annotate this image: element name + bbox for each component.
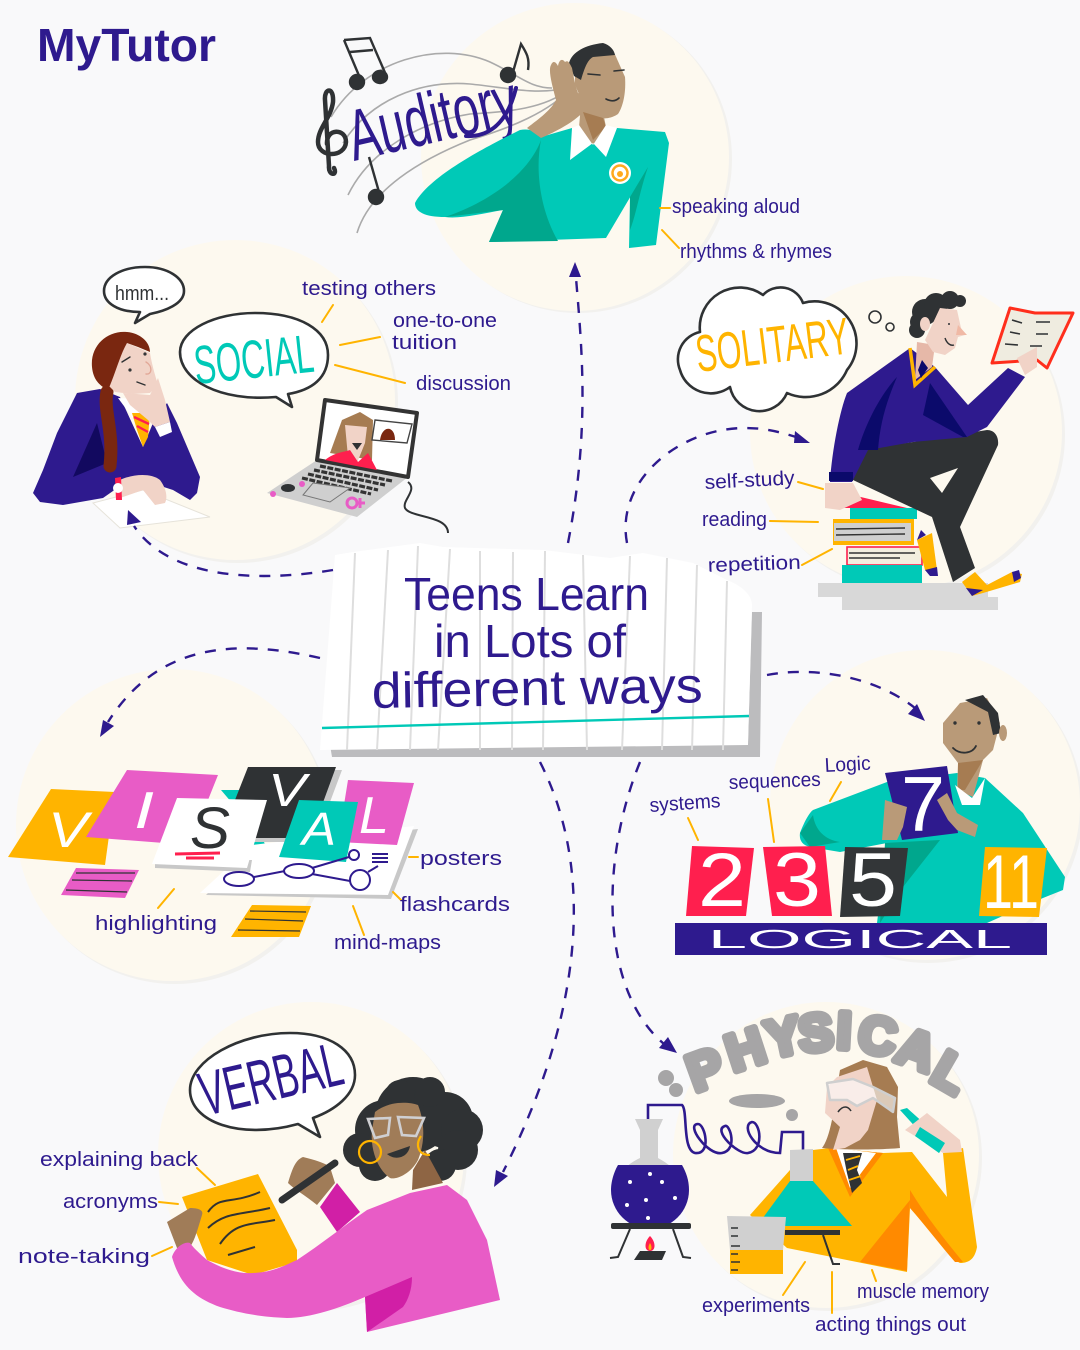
trousers <box>853 430 998 582</box>
label: repetition: repetition <box>707 552 801 577</box>
boy: collar <box>955 778 985 805</box>
panel: physical <box>610 1002 989 1336</box>
hair <box>822 1060 900 1150</box>
collar and tie <box>828 1148 883 1197</box>
woman: hair <box>343 1077 483 1181</box>
girl: hair <box>92 332 150 390</box>
boy: hair <box>965 695 1001 735</box>
sweater shadow <box>445 140 648 242</box>
smoke puffs <box>658 1070 798 1121</box>
boy: ear <box>999 725 1007 741</box>
swatch: orange <box>231 905 311 937</box>
center note card <box>320 543 762 757</box>
right sleeve <box>320 1183 360 1232</box>
boy: head and neck <box>943 698 1000 797</box>
label: mind-maps: mind-maps <box>334 932 441 954</box>
front foot <box>962 570 1022 596</box>
thought bubbles <box>869 311 894 331</box>
panel: auditory <box>318 3 832 313</box>
sweater shadow <box>365 1277 412 1332</box>
coiled tube <box>648 1105 803 1153</box>
girl: supporting hand <box>123 378 170 427</box>
arrow: to visual <box>100 648 320 737</box>
card: A <box>279 800 358 862</box>
laptop <box>267 400 417 517</box>
label: acting things out: acting things out <box>815 1314 966 1336</box>
neck and collar <box>910 342 935 385</box>
boy: face details <box>588 70 624 101</box>
mind map <box>224 850 388 890</box>
teal card behind <box>221 790 270 855</box>
leader lines <box>688 782 841 842</box>
conical flask <box>757 1149 852 1264</box>
boy: head <box>575 49 625 118</box>
leader lines <box>770 482 832 565</box>
card shadow <box>330 612 762 757</box>
boy: face details <box>953 722 980 753</box>
title line 1: Teens Learn <box>404 568 649 620</box>
label: rhythms and rhymes: rhythms & rhymes <box>680 241 832 263</box>
left hand <box>167 1208 202 1248</box>
girl: tie <box>132 413 150 447</box>
card: S <box>152 798 267 868</box>
boy: hair <box>569 43 615 80</box>
head <box>925 308 965 355</box>
arrow: to solitary <box>626 428 810 543</box>
red underline <box>175 853 220 858</box>
icon: treble clef <box>318 90 346 174</box>
hands <box>882 793 978 840</box>
icon: quarter note <box>369 157 383 204</box>
beaker <box>727 1216 786 1274</box>
hair <box>909 291 966 338</box>
speech bubble: social <box>180 313 328 407</box>
label: reading: reading <box>702 509 767 531</box>
logo: MyTutor: MyTutor <box>37 19 216 71</box>
heading: SOCIAL: SOCIAL <box>191 324 317 396</box>
panel: visual <box>8 669 510 984</box>
scribbles <box>208 1192 275 1255</box>
paper <box>182 1174 297 1275</box>
nose and smile <box>945 323 967 345</box>
panel: verbal <box>18 1002 500 1332</box>
girl: sweater <box>33 389 200 505</box>
arrow: to social <box>127 510 333 576</box>
panel: logical <box>649 650 1080 963</box>
text: hmm: hmm... <box>115 283 169 305</box>
face <box>825 1067 877 1150</box>
text: V: V <box>48 802 94 858</box>
label: note-taking: note-taking <box>18 1246 150 1268</box>
ear <box>920 317 930 331</box>
label: flashcards: flashcards <box>400 894 510 916</box>
card: 7 <box>885 766 958 840</box>
leader lines <box>660 208 679 248</box>
hand on books <box>825 483 862 510</box>
steps <box>818 583 998 610</box>
smoke heading: PHYSICAL: PHYSICAL <box>679 1002 979 1106</box>
boy: neck <box>579 105 606 145</box>
text: I: I <box>134 782 154 840</box>
title line 3: different ways <box>371 657 703 719</box>
girl: resting hand <box>120 475 166 505</box>
swatch: pink <box>61 868 139 898</box>
book stack <box>833 493 922 583</box>
pen <box>282 1163 335 1200</box>
text: 2: 2 <box>698 838 746 923</box>
arrow: to auditory <box>568 262 582 543</box>
sweater shadow <box>800 815 940 923</box>
woman: mouth <box>387 1146 410 1158</box>
boy: collar <box>570 125 617 160</box>
label: muscle memory: muscle memory <box>857 1281 989 1303</box>
label: posters: posters <box>420 848 502 870</box>
mouth <box>838 1107 851 1112</box>
paper <box>93 490 210 528</box>
leader lines <box>783 1262 876 1313</box>
card: 3 <box>763 846 832 916</box>
label: highlighting: highlighting <box>95 913 217 935</box>
badge <box>609 162 631 184</box>
icon: cat and hearts stickers <box>270 481 305 497</box>
tube over hand <box>915 1127 945 1153</box>
goggles <box>827 1079 895 1112</box>
girl: wristband <box>113 477 123 500</box>
text: S: S <box>190 796 230 861</box>
laptop cable <box>405 482 448 533</box>
ruled lines <box>347 546 727 750</box>
teal rule <box>322 716 749 728</box>
right hand <box>288 1157 335 1205</box>
test tube <box>900 1108 945 1153</box>
icon: laptop sticker <box>347 498 365 508</box>
label: systems: systems <box>649 790 721 817</box>
heading swoosh <box>466 88 516 136</box>
card: 5 <box>840 847 908 917</box>
sweater shadow <box>860 1190 963 1271</box>
poster <box>200 826 418 899</box>
round flask <box>611 1119 689 1229</box>
woman: glasses <box>368 1117 424 1138</box>
label: experiments: experiments <box>702 1295 810 1317</box>
hand holding tube <box>905 1113 962 1153</box>
boy: sweater <box>415 128 669 248</box>
card: 2 <box>686 846 754 916</box>
sweater shading <box>73 423 107 477</box>
boy: sweater <box>800 773 1065 923</box>
sweater <box>172 1185 500 1332</box>
speech bubble: verbal <box>190 1033 355 1137</box>
text: L: L <box>359 787 389 845</box>
card shadow: V <box>224 770 342 842</box>
woman: earrings <box>359 1136 430 1163</box>
girl: braid <box>106 392 111 466</box>
woman: neck <box>412 1150 443 1190</box>
leader lines <box>158 857 418 935</box>
sweater <box>750 1148 977 1272</box>
text: 11: 11 <box>983 840 1039 925</box>
girl: cuff <box>155 422 172 437</box>
text: 5: 5 <box>849 838 897 923</box>
arrow: to logical <box>767 672 925 721</box>
panel: social <box>33 240 511 563</box>
banner: LOGICAL <box>675 923 1047 955</box>
card: 11 <box>979 847 1047 917</box>
label: sequences: sequences <box>728 769 821 794</box>
panel: solitary <box>678 276 1073 610</box>
burner flame <box>634 1236 666 1260</box>
reading hand <box>1017 347 1037 375</box>
back leg <box>917 530 938 576</box>
text: 3: 3 <box>773 838 821 923</box>
banner text: LOGICAL <box>708 924 1012 954</box>
label: acronyms: acronyms <box>63 1191 158 1213</box>
text: 7: 7 <box>901 760 945 848</box>
girl: collar <box>118 398 160 425</box>
girl: face details <box>122 353 151 385</box>
boy: neck shadow <box>958 760 983 790</box>
leader lines <box>322 305 405 383</box>
card: V <box>8 789 115 865</box>
text: dark V: V <box>268 764 311 816</box>
card: L <box>338 780 414 845</box>
arrow: to physical <box>612 762 677 1053</box>
woman: face <box>372 1103 423 1178</box>
heading: Auditory: Auditory <box>340 60 525 177</box>
girl: face <box>108 343 158 394</box>
icon: eighth note <box>501 44 529 82</box>
thought cloud <box>678 287 857 411</box>
heading: VERBAL: VERBAL <box>193 1030 349 1130</box>
arrow: to verbal <box>494 762 574 1187</box>
label: speaking aloud: speaking aloud <box>672 196 800 218</box>
icon: beamed notes <box>344 38 387 89</box>
label: Logic: Logic <box>824 753 871 777</box>
label: self-study: self-study <box>704 467 795 494</box>
card paper <box>320 543 752 750</box>
leader lines <box>152 1168 215 1256</box>
label: discussion: discussion <box>416 373 511 395</box>
text: A: A <box>299 803 336 855</box>
label: explaining back: explaining back <box>40 1149 199 1171</box>
sweater <box>830 348 1025 482</box>
card: I <box>86 770 218 845</box>
boy: raised hand <box>527 60 590 138</box>
tripod <box>610 1223 691 1258</box>
label: one-to-one: one-to-one <box>393 310 497 332</box>
music staves <box>331 53 572 233</box>
card shadow: S <box>155 860 252 872</box>
card: dark V <box>220 767 336 838</box>
sweater shadows <box>829 377 967 481</box>
label: testing others: testing others <box>302 278 436 300</box>
heading: SOLITARY: SOLITARY <box>692 308 852 384</box>
speech bubble: hmm <box>104 267 184 323</box>
title line 2: in Lots of <box>434 615 626 667</box>
label: tuition: tuition <box>392 332 457 354</box>
book <box>992 308 1073 368</box>
